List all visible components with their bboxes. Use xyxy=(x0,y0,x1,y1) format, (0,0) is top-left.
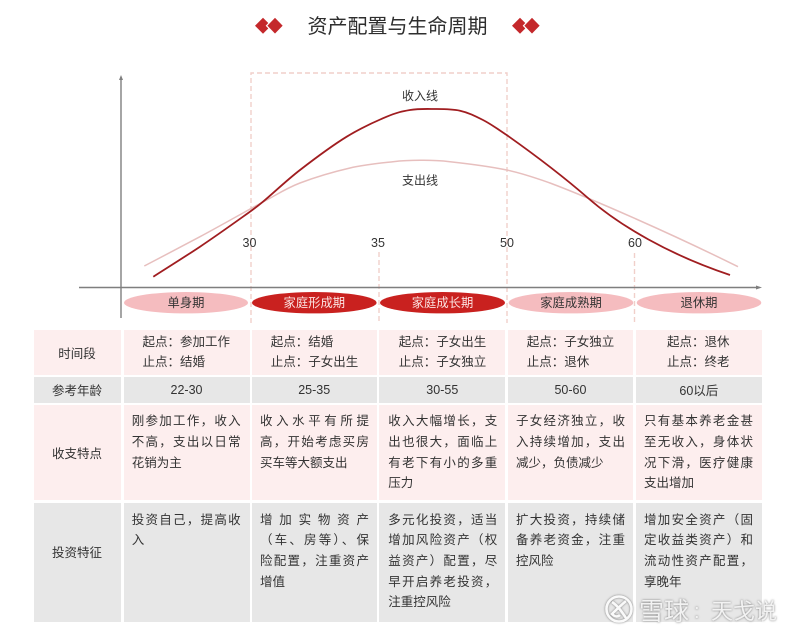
stage: family growth xyxy=(380,292,505,313)
watermark text xyxy=(639,598,777,626)
cell: stage 3 investment: 注重控风险 xyxy=(388,595,451,609)
cell: age 22-30: 22-30 xyxy=(170,383,202,397)
row label: reference age: 参考年龄 xyxy=(52,384,102,398)
cell: stage 3 investment xyxy=(379,502,505,622)
cell: stage 2 investment: （车、房等）、保 xyxy=(260,533,369,547)
cell: stage 2 traits: 高，开始考虑买房 xyxy=(260,435,369,449)
cell: stage 1 period xyxy=(124,330,250,374)
cell: stage 4 investment: 扩大投资，持续储 xyxy=(516,513,625,527)
cell: stage 4 traits: 减少，负债减少 xyxy=(516,456,604,470)
stage: single: 单身期 xyxy=(168,295,204,310)
cell: stage 4 investment: 备养老资金，注重 xyxy=(516,533,625,547)
cell: stage 5 investment: 流动性资产配置， xyxy=(644,554,753,568)
cell: stage 5 investment: 增加安全资产（固 xyxy=(644,513,753,527)
cell: stage 5 period: 止点：终老 xyxy=(667,355,730,369)
cell: stage 1 period: 止点：结婚 xyxy=(142,355,205,369)
cell: stage 2 period xyxy=(252,330,377,374)
icon: watermark logo xyxy=(606,596,632,622)
cell: stage 2 traits: 买车等大额支出 xyxy=(260,456,348,470)
cell: stage 1 investment xyxy=(124,502,250,622)
cell: stage 5 period xyxy=(636,330,762,374)
cell: age 30-55: 30-55 xyxy=(426,383,458,397)
cell: stage 3 period: 起点：子女出生 xyxy=(399,334,486,348)
cell: age 25-35: 25-35 xyxy=(298,383,330,397)
cell: age 22-30 xyxy=(124,377,250,402)
stage: single xyxy=(124,292,248,313)
cell: stage 5 traits: 至无收入，身体状 xyxy=(644,435,753,449)
label: expense line: 支出线 xyxy=(402,174,438,188)
axes xyxy=(79,75,762,318)
cell: stage 1 period: 起点：参加工作 xyxy=(142,334,230,348)
cell: stage 2 investment: 险配置，注重资产 xyxy=(260,554,369,568)
cell: stage 1 traits: 刚参加工作，收入 xyxy=(132,414,241,428)
cell: stage 2 investment xyxy=(252,502,377,622)
icon: right red diamonds xyxy=(512,17,540,34)
cell: stage 4 period xyxy=(508,330,633,374)
cell: stage 3 traits: 收入大幅增长，支 xyxy=(388,414,497,428)
cell: stage 1 traits xyxy=(124,405,250,500)
cell: age 60+: 60以后 xyxy=(679,384,718,398)
cell: stage 5 investment: 享晚年 xyxy=(644,575,682,589)
stage: retirement xyxy=(637,292,761,313)
age tick labels xyxy=(243,236,642,250)
cell: stage 2 traits: 收入水平有所提 xyxy=(260,414,369,428)
cell: age 25-35 xyxy=(252,377,377,402)
row label: income and expense traits xyxy=(34,405,120,500)
cell: stage 5 investment xyxy=(636,502,762,622)
cell: stage 4 period: 止点：退休 xyxy=(527,355,589,369)
cell: stage 1 traits: 花销为主 xyxy=(132,456,182,470)
age tick labels: 35 xyxy=(371,236,385,250)
stage: family maturity: 家庭成熟期 xyxy=(540,295,602,310)
cell: stage 2 period: 起点：结婚 xyxy=(271,334,333,348)
stage: family formation: 家庭形成期 xyxy=(284,295,345,310)
watermark text: 天戈说 xyxy=(711,599,777,624)
age tick labels: 30 xyxy=(243,236,256,250)
cell: stage 4 investment: 控风险 xyxy=(516,554,554,568)
stage: family growth: 家庭成长期 xyxy=(412,295,473,310)
cell: stage 4 traits: 子女经济独立，收 xyxy=(516,414,625,428)
title: 资产配置与生命周期 xyxy=(308,15,488,38)
stage: family maturity xyxy=(509,292,633,313)
cell: stage 4 period: 起点：子女独立 xyxy=(527,334,614,348)
row label: time period xyxy=(34,330,120,374)
cell: stage 3 traits: 有老下有小的多重 xyxy=(388,456,497,470)
cell: stage 5 investment: 定收益类资产）和 xyxy=(644,533,753,547)
cell: stage 3 investment: 益资产）配置，尽 xyxy=(388,554,497,568)
stage: retirement: 退休期 xyxy=(681,296,717,310)
cell: stage 5 traits: 况下滑，医疗健康 xyxy=(644,456,753,470)
dashed highlight box and age guides xyxy=(251,73,634,323)
cell: stage 3 period xyxy=(379,330,505,374)
row label: investment traits: 投资特征 xyxy=(52,546,102,560)
cell: stage 3 investment: 增加风险资产（权 xyxy=(388,533,497,547)
cell: stage 5 traits: 支出增加 xyxy=(644,476,694,490)
cell: stage 1 investment: 投资自己，提高收 xyxy=(132,513,241,527)
cell: stage 3 period: 止点：子女独立 xyxy=(399,355,486,369)
row label: reference age xyxy=(34,377,120,402)
row label: income and expense traits: 收支特点 xyxy=(52,447,102,461)
cell: stage 1 traits: 不高，支出以日常 xyxy=(132,435,241,449)
cell: stage 3 investment: 多元化投资，适当 xyxy=(388,513,497,527)
cell: stage 4 traits: 入持续增加，支出 xyxy=(516,435,625,449)
age tick labels: 50 xyxy=(500,236,514,250)
cell: stage 3 traits: 压力 xyxy=(388,476,413,490)
cell: stage 5 period: 起点：退休 xyxy=(667,334,730,348)
watermark text: 雪球 xyxy=(639,598,689,626)
cell: stage 2 period: 止点：子女出生 xyxy=(271,355,358,369)
cell: stage 2 investment: 增加实物资产 xyxy=(260,513,369,527)
icon: left red diamonds xyxy=(255,17,284,34)
row label: time period: 时间段 xyxy=(58,347,96,361)
label: income line: 收入线 xyxy=(402,89,438,103)
cell: stage 1 investment: 入 xyxy=(132,533,144,547)
cell: stage 2 investment: 增值 xyxy=(260,575,285,589)
cell: age 50-60: 50-60 xyxy=(554,383,586,397)
cell: stage 5 traits: 只有基本养老金甚 xyxy=(644,414,753,428)
row label: investment traits xyxy=(34,502,120,622)
cell: age 50-60 xyxy=(508,377,633,402)
cell: stage 4 traits xyxy=(508,405,633,500)
watermark xyxy=(606,596,777,626)
watermark text: : xyxy=(694,601,700,623)
income line xyxy=(153,109,730,277)
cell: stage 3 traits: 出也很大，面临上 xyxy=(388,435,497,449)
cell: stage 3 investment: 早开启养老投资， xyxy=(388,575,497,589)
cell: stage 3 traits xyxy=(379,405,505,500)
stage: family formation xyxy=(252,292,377,313)
cell: age 30-55 xyxy=(379,377,505,402)
age tick labels: 60 xyxy=(628,236,642,250)
cell: stage 4 investment xyxy=(508,502,633,622)
expense line xyxy=(144,160,738,267)
cell: stage 2 traits xyxy=(252,405,377,500)
cell: stage 5 traits xyxy=(636,405,762,500)
cell: age 60+ xyxy=(636,377,762,402)
